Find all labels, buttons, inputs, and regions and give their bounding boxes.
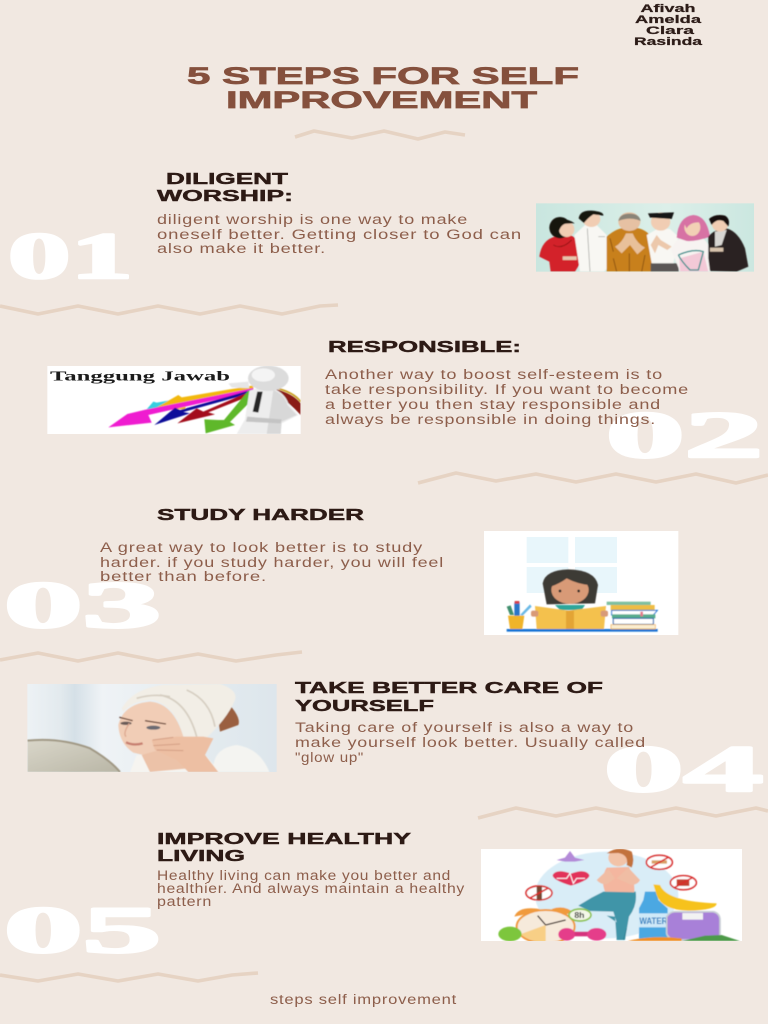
heading: take better care of yourself <box>295 680 603 715</box>
authors <box>634 3 703 48</box>
authors: Afivah <box>640 3 696 15</box>
number 04: 04 <box>604 733 763 806</box>
woman in black <box>708 228 748 272</box>
vegetables <box>628 937 682 941</box>
panel: step 5 healthy living <box>157 831 742 943</box>
heading: diligent worship: WORSHIP: <box>157 188 293 205</box>
text: responsible body: a better you then stay responsible and <box>325 397 661 412</box>
heading: improve healthy living: IMPROVE HEALTHY <box>157 831 412 848</box>
banana <box>653 884 717 911</box>
dumbbell <box>573 932 595 936</box>
text: self care body: "glow up" <box>295 750 364 765</box>
authors: Clara <box>646 25 696 37</box>
text: healthy living body: healthier. And always maintain a healthy <box>157 881 465 896</box>
authors: Rasinda <box>634 36 703 48</box>
man with cap <box>647 228 678 263</box>
icon: woman with towel at mirror <box>27 684 277 772</box>
figure <box>237 388 298 434</box>
text: responsible body <box>325 367 689 427</box>
number 03: 03 <box>4 569 161 642</box>
text: diligent worship body: oneself better. Getting closer to God can <box>157 227 522 242</box>
icon: tanggung jawab figure with arrows <box>47 366 301 434</box>
bottle <box>639 892 668 940</box>
text: study harder body: harder. if you study harder, you will feel <box>100 555 444 570</box>
text: healthy living body <box>157 868 465 909</box>
woman in tree pose <box>578 892 636 940</box>
monk in orange <box>607 228 652 272</box>
icon: tanggung jawab figure with arrows: Tanggung Jawab <box>50 370 230 385</box>
title: IMPROVEMENT <box>226 87 538 114</box>
panel: step 1 diligent worship <box>157 171 754 272</box>
icon: group of people of different faiths <box>536 203 754 272</box>
text: self care body: make yourself look better. Usually called <box>295 735 646 750</box>
footer: steps self improvement <box>270 992 457 1007</box>
number 01: 01 <box>8 220 133 293</box>
text: responsible body: Another way to boost self-esteem is to <box>325 367 663 382</box>
heading: improve healthy living <box>157 831 412 865</box>
text: responsible body: always be responsible in doing things. <box>325 412 656 427</box>
heading: take better care of yourself: YOURSELF <box>295 698 434 715</box>
title: 5 STEPS FOR SELF <box>187 63 579 90</box>
panel: step 2 responsible <box>47 339 689 434</box>
text: study harder body: A great way to look better is to study <box>100 540 423 555</box>
text: self care body: Taking care of yourself is also a way to <box>295 720 634 735</box>
heading: study harder: STUDY HARDER <box>157 507 365 524</box>
text: healthy living body: Healthy living can make you better and <box>157 868 451 883</box>
text: diligent worship body: diligent worship is one way to make <box>157 212 468 227</box>
woman in red <box>539 235 584 272</box>
text: healthy living body: pattern <box>157 894 212 909</box>
clock <box>514 907 574 917</box>
icon: healthy lifestyle illustration: WATER <box>639 916 668 926</box>
text: study harder body <box>100 540 444 584</box>
woman in pink hijab <box>671 237 710 272</box>
heading: diligent worship <box>157 171 293 205</box>
title <box>187 63 579 114</box>
scale <box>667 912 720 940</box>
apple <box>498 927 522 941</box>
icon: girl reading with books <box>484 531 678 635</box>
text: self care body <box>295 720 646 765</box>
panel: step 4 take better care <box>27 680 646 772</box>
text: responsible body: take responsibility. If you want to become <box>325 382 689 397</box>
heading: improve healthy living: LIVING <box>157 848 245 865</box>
text: study harder body: better than before. <box>100 569 267 584</box>
heading: take better care of yourself: TAKE BETTER CARE OF <box>295 680 603 697</box>
number 02: 02 <box>606 399 763 472</box>
panel: step 3 study harder <box>100 507 678 635</box>
heading: responsible: RESPONSIBLE: <box>328 339 521 356</box>
icon: healthy lifestyle illustration: 8h <box>574 910 584 920</box>
man in white <box>574 225 609 272</box>
icon: healthy lifestyle illustration <box>481 849 742 943</box>
number 05: 05 <box>4 894 161 967</box>
authors: Amelda <box>635 14 702 26</box>
text: diligent worship body <box>157 212 522 256</box>
heading: diligent worship: DILIGENT <box>166 171 288 188</box>
text: diligent worship body: also make it better. <box>157 241 326 256</box>
